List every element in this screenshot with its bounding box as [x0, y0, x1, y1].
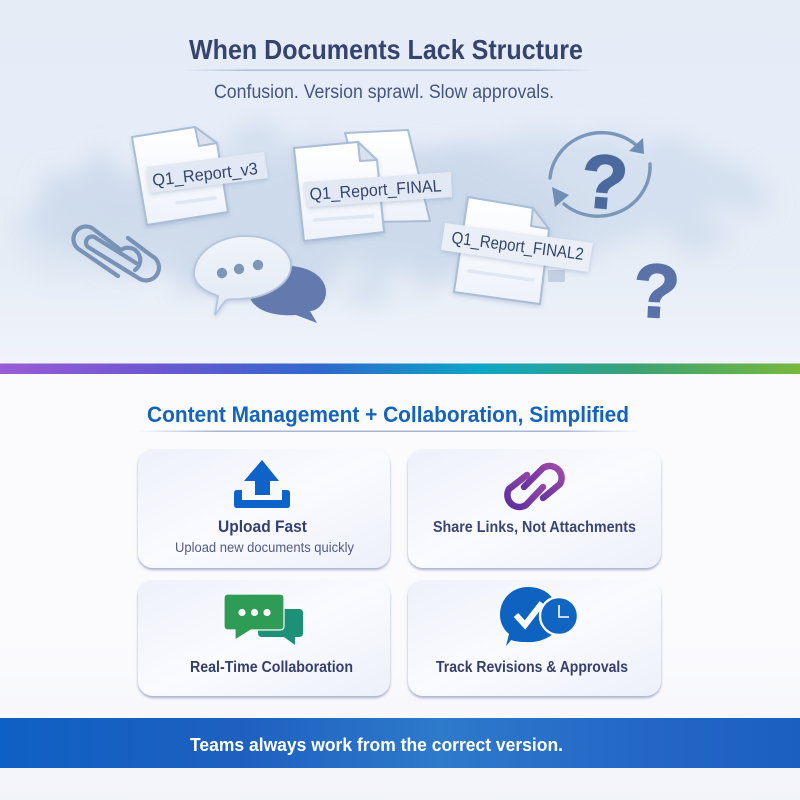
icon: check bubble with clock: [500, 587, 578, 646]
card: real-time collaboration: [138, 580, 390, 696]
title: When Documents Lack Structure: [189, 34, 583, 65]
document: Q1_Report_v3: Q1_Report_v3: [151, 159, 259, 190]
icon: upload: [234, 460, 290, 508]
icon: link: [507, 466, 562, 507]
panel: problem section background: [0, 0, 800, 364]
card: upload fast: Upload Fast: [218, 517, 307, 536]
card: upload fast: Upload new documents quickly: [175, 540, 354, 555]
footer banner: Teams always work from the correct version.: [190, 735, 563, 755]
icon: speech bubbles: [194, 236, 326, 323]
section heading: Content Management + Collaboration, Simplified: [147, 402, 629, 427]
subtitle: Confusion. Version sprawl. Slow approvals.: [214, 82, 554, 103]
card: track revisions: Track Revisions & Approvals: [436, 659, 628, 676]
gradient divider bar: [0, 364, 800, 374]
card: share links: Share Links, Not Attachments: [433, 519, 636, 536]
card: share links: [408, 449, 661, 568]
icon: question mark: ?: [631, 248, 682, 335]
card: track revisions: [408, 580, 661, 696]
footer banner: [0, 718, 800, 768]
card: real-time collaboration: Real-Time Collaboration: [190, 659, 353, 676]
document: Q1_Report_FINAL2: Q1_Report_FINAL2: [450, 228, 585, 264]
document: Q1_Report_FINAL: Q1_Report_FINAL: [309, 176, 442, 204]
document: Q1_Report_v3: [132, 127, 268, 225]
document: Q1_Report_FINAL2: [441, 197, 593, 304]
document: Q1_Report_FINAL: [294, 130, 452, 241]
card: upload fast: [138, 449, 390, 568]
icon: chat bubbles: [224, 594, 303, 645]
icon: circular arrows with question mark: ?: [578, 138, 631, 227]
icon: paperclip: [73, 226, 159, 280]
icon: circular arrows with question mark: [550, 133, 650, 227]
